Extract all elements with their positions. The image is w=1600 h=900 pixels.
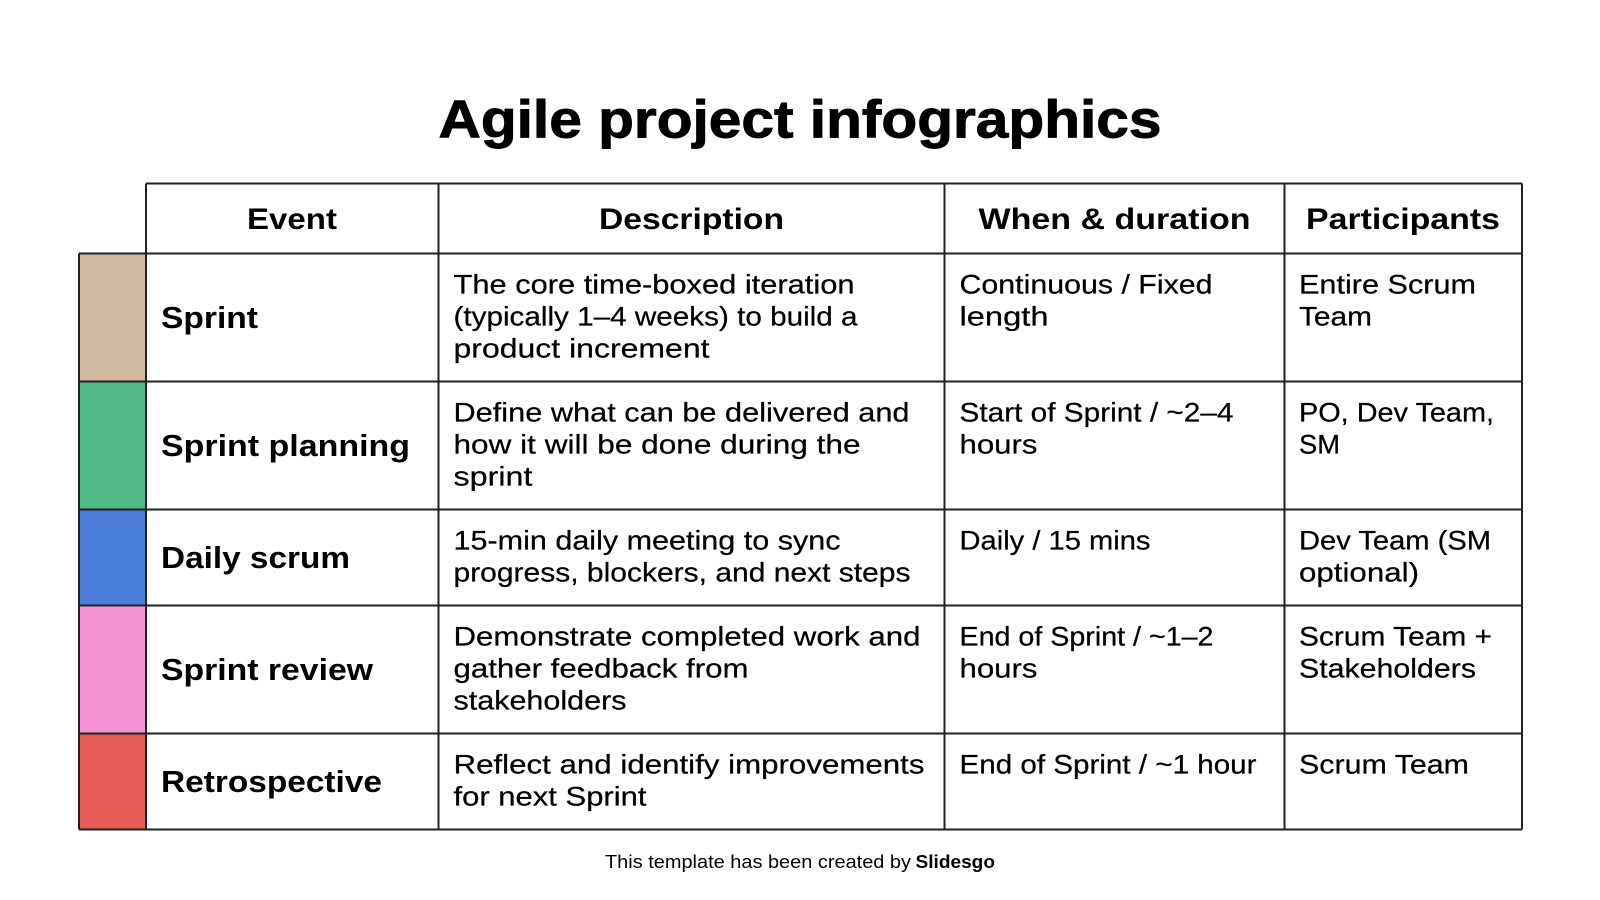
header row: Event xyxy=(247,203,337,236)
row: Retrospective: Retrospective xyxy=(161,764,382,799)
footer credit: This template has been created by xyxy=(605,851,912,872)
panel: agile events table xyxy=(79,184,1522,830)
row: Sprint: Continuous / Fixed xyxy=(960,270,1212,300)
row: Sprint planning: SM xyxy=(1299,430,1340,460)
row: Sprint review xyxy=(161,622,1492,716)
row: Retrospective: for next Sprint xyxy=(454,782,647,812)
table grid xyxy=(79,184,1522,830)
row: Sprint review: Stakeholders xyxy=(1299,654,1476,684)
row: Sprint: Sprint xyxy=(161,300,258,335)
title: Agile project infographics xyxy=(438,90,1162,150)
header row: When & duration xyxy=(978,203,1250,236)
row: Sprint review: Demonstrate completed work and xyxy=(454,622,920,652)
row: Sprint: The core time-boxed iteration xyxy=(454,270,854,300)
row: Sprint review: End of Sprint / ~1–2 xyxy=(960,622,1214,652)
row: Sprint planning: Define what can be delivered and xyxy=(454,398,910,428)
row: Sprint review: Sprint review xyxy=(161,652,374,687)
row: Sprint planning: PO, Dev Team, xyxy=(1299,398,1494,428)
row: Sprint planning: Sprint planning xyxy=(161,428,410,463)
row: Daily scrum: Daily scrum xyxy=(161,540,350,575)
row: Daily scrum: Dev Team (SM xyxy=(1299,526,1491,556)
row: Sprint planning: sprint xyxy=(454,462,533,492)
row: Sprint review: stakeholders xyxy=(454,686,626,716)
row: Sprint planning xyxy=(161,398,1494,492)
row: Daily scrum: progress, blockers, and next steps xyxy=(454,558,910,588)
row: Retrospective: Reflect and identify improvements xyxy=(454,750,924,780)
row: Sprint planning: how it will be done during the xyxy=(454,430,860,460)
row: Daily scrum: optional) xyxy=(1299,558,1419,588)
row: Sprint: product increment xyxy=(454,334,710,364)
row: Sprint planning: Start of Sprint / ~2–4 xyxy=(960,398,1234,428)
row: Sprint review: Scrum Team + xyxy=(1299,622,1492,652)
row: Sprint: Team xyxy=(1299,302,1372,332)
header row: Description xyxy=(599,203,784,236)
row: Sprint: (typically 1–4 weeks) to build a xyxy=(454,302,859,332)
row: Retrospective: End of Sprint / ~1 hour xyxy=(960,750,1256,780)
colour swatches xyxy=(79,254,146,830)
footer credit: Slidesgo xyxy=(916,851,995,872)
row: Daily scrum xyxy=(161,526,1491,588)
row: Sprint review: gather feedback from xyxy=(454,654,748,684)
row: Daily scrum: Daily / 15 mins xyxy=(960,526,1150,556)
row: Sprint planning: hours xyxy=(960,430,1038,460)
row: Sprint: length xyxy=(960,302,1048,332)
row: Retrospective: Scrum Team xyxy=(1299,750,1469,780)
row: Daily scrum: 15-min daily meeting to sync xyxy=(454,526,840,556)
header row xyxy=(247,203,1500,236)
header row: Participants xyxy=(1306,203,1500,236)
row: Retrospective xyxy=(161,750,1469,812)
row: Sprint xyxy=(161,270,1476,364)
row: Sprint review: hours xyxy=(960,654,1038,684)
row: Sprint: Entire Scrum xyxy=(1299,270,1476,300)
